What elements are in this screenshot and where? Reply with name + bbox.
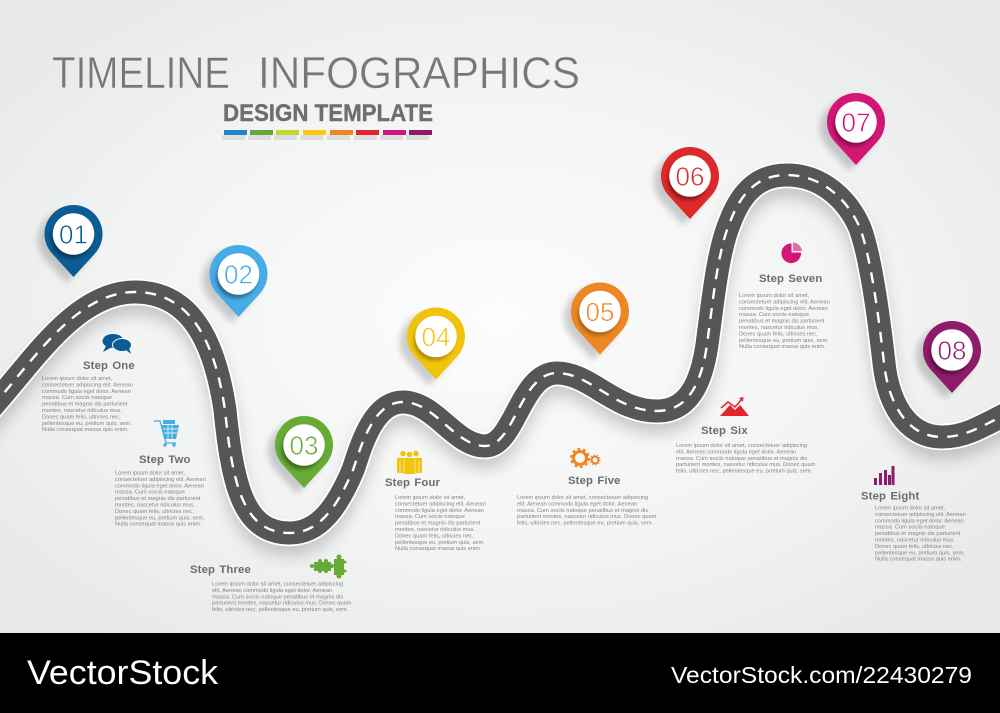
step two text: Lorem ipsum dolor sit amet, [115, 470, 186, 476]
step four text: pellentesque eu, pretium quis, sem. [395, 540, 485, 546]
step four text: massa. Cum sociis natoque [395, 514, 465, 520]
step one text [42, 360, 135, 433]
step eight text: consectetuer adipiscing elit. Aenean [875, 512, 966, 518]
step one text: commodo ligula eget dolor. Aenean [42, 389, 131, 395]
step five text: Lorem ipsum dolor sit amet, consectetuer adipiscing [517, 495, 648, 501]
icon: mountain chart [720, 397, 749, 416]
step seven text: Donec quam felis, ultricies nec, [739, 331, 818, 337]
step six text: elit. Aenean commodo ligula eget dolor. Aenean [676, 449, 796, 455]
step eight text: commodo ligula eget dolor. Aenean [875, 518, 964, 524]
step three text: massa. Cum sociis natoque penatibus et magnis dis [212, 594, 343, 600]
step seven text: pellentesque eu, pretium quis, sem. [739, 338, 829, 344]
step four text: Donec quam felis, ultricies nec, [395, 533, 474, 539]
title: INFOGRAPHICS [258, 49, 580, 98]
pin 03: 03 [290, 430, 318, 460]
footer band [0, 633, 1000, 713]
pin 05 [564, 282, 629, 360]
step four text: consectetuer adipiscing elit. Aenean [395, 501, 486, 507]
pin 03 [268, 416, 333, 494]
step one text: massa. Cum sociis natoque [42, 395, 112, 401]
step three text: Step Three [190, 564, 251, 576]
pin 02: 02 [224, 260, 253, 290]
pin 04 [400, 308, 465, 386]
step eight text: Nulla consequat massa quis enim. [875, 557, 962, 563]
winding road [0, 175, 1000, 544]
step two text: commodo ligula eget dolor. Aenean [115, 483, 204, 489]
icon: shopping cart [154, 420, 179, 447]
icon: pie chart [781, 242, 802, 263]
subtitle: DESIGN TEMPLATE [223, 100, 433, 127]
icon: team [397, 451, 422, 474]
footer image id: VectorStock.com/22430279 [671, 662, 972, 688]
step eight text: montes, nascetur ridiculus mus. [875, 538, 955, 544]
step six text [676, 425, 816, 475]
step four text: Lorem ipsum dolor sit amet, [395, 495, 466, 501]
step seven text: commodo ligula eget dolor. Aenean [739, 306, 828, 312]
step one text: Donec quam felis, ultricies nec, [42, 414, 121, 420]
pin 01 [38, 205, 103, 283]
pin 01: 01 [59, 220, 88, 250]
pin 04: 04 [422, 322, 450, 352]
step seven text: montes, nascetur ridiculus mus. [739, 325, 819, 331]
step six text: felis, ultricies nec, pellentesque eu, pretium quis, sem. [676, 469, 813, 475]
step five text: massa. Cum sociis natoque penatibus et magnis dis [517, 508, 648, 514]
pin 08: 08 [938, 336, 966, 366]
step seven text: Step Seven [759, 273, 822, 285]
pin 05: 05 [586, 297, 614, 327]
step one text: consectetuer adipiscing elit. Aenean [42, 382, 133, 388]
step three text: elit. Aenean commodo ligula eget dolor. Aenean [212, 588, 332, 594]
icon: puzzle [310, 554, 346, 578]
step seven text: penatibus et magnis dis parturient [739, 319, 825, 325]
step one text: Nulla consequat massa quis enim. [42, 427, 129, 433]
pin 08 [916, 321, 981, 399]
step seven text [739, 273, 830, 350]
step one text: montes, nascetur ridiculus mus. [42, 408, 122, 414]
step four text: commodo ligula eget dolor. Aenean [395, 508, 484, 514]
step one text: Step One [83, 360, 135, 372]
step one text: pellentesque eu, pretium quis, sem. [42, 421, 132, 427]
step one text: penatibus et magnis dis parturient [42, 402, 128, 408]
step three text: felis, ultricies nec, pellentesque eu, pretium quis, sem. [212, 607, 349, 613]
step two text: Step Two [139, 454, 191, 466]
step two text: consectetuer adipiscing elit. Aenean [115, 477, 206, 483]
step four text: Step Four [385, 477, 441, 489]
step eight text: pellentesque eu, pretium quis, sem. [875, 550, 965, 556]
step three text: Lorem ipsum dolor sit amet, consectetuer adipiscing [212, 582, 343, 588]
step four text [385, 477, 486, 552]
step eight text: Donec quam felis, ultricies nec, [875, 544, 954, 550]
step six text: parturient montes, nascetur ridiculus mus. Donec quam [676, 462, 816, 468]
step four text: penatibus et magnis dis parturient [395, 521, 481, 527]
step two text: montes, nascetur ridiculus mus. [115, 502, 195, 508]
step eight text: Step Eight [861, 490, 919, 502]
step two text: penatibus et magnis dis parturient [115, 496, 201, 502]
step three text: parturient montes, nascetur ridiculus mus. Donec quam [212, 601, 352, 607]
step four text: montes, nascetur ridiculus mus. [395, 527, 475, 533]
step seven text: Nulla consequat massa quis enim. [739, 344, 826, 350]
step five text: parturient montes, nascetur ridiculus mus. Donec quam [517, 514, 657, 520]
step six text: Lorem ipsum dolor sit amet, consectetuer adipiscing [676, 443, 807, 449]
step five text: elit. Aenean commodo ligula eget dolor. Aenean [517, 501, 637, 507]
title: TIMELINE [52, 49, 230, 98]
step two text: pellentesque eu, pretium quis, sem. [115, 515, 205, 521]
step eight text: penatibus et magnis dis parturient [875, 531, 961, 537]
footer logo: VectorStock [27, 654, 219, 692]
pin 06 [654, 147, 719, 225]
colour bars [222, 130, 432, 140]
step eight text: massa. Cum sociis natoque [875, 525, 945, 531]
step eight text: Lorem ipsum dolor sit amet, [875, 506, 946, 512]
step four text: Nulla consequat massa quis enim. [395, 546, 482, 552]
pin 02 [202, 245, 268, 323]
step seven text: massa. Cum sociis natoque [739, 312, 809, 318]
step seven text: consectetuer adipiscing elit. Aenean [739, 299, 830, 305]
title [52, 49, 580, 98]
icon: gears [571, 449, 600, 467]
step two text: massa. Cum sociis natoque [115, 490, 185, 496]
pin 07: 07 [842, 108, 870, 138]
icon: bar chart [874, 466, 894, 485]
step six text: massa. Cum sociis natoque penatibus et magnis dis [676, 456, 807, 462]
step two text: Donec quam felis, ultricies nec, [115, 509, 194, 515]
pin 06: 06 [676, 162, 704, 192]
pin 07 [820, 93, 885, 171]
icon: speech bubbles [102, 334, 132, 354]
step two text [115, 454, 206, 528]
step five text: Step Five [568, 475, 621, 487]
step six text: Step Six [701, 425, 748, 437]
step seven text: Lorem ipsum dolor sit amet, [739, 293, 810, 299]
step eight text [861, 490, 966, 563]
step two text: Nulla consequat massa quis enim. [115, 522, 202, 528]
step five text [517, 475, 657, 527]
step one text: Lorem ipsum dolor sit amet, [42, 376, 113, 382]
step five text: felis, ultricies nec, pellentesque eu, pretium quis, sem. [517, 521, 654, 527]
step three text [190, 564, 352, 613]
